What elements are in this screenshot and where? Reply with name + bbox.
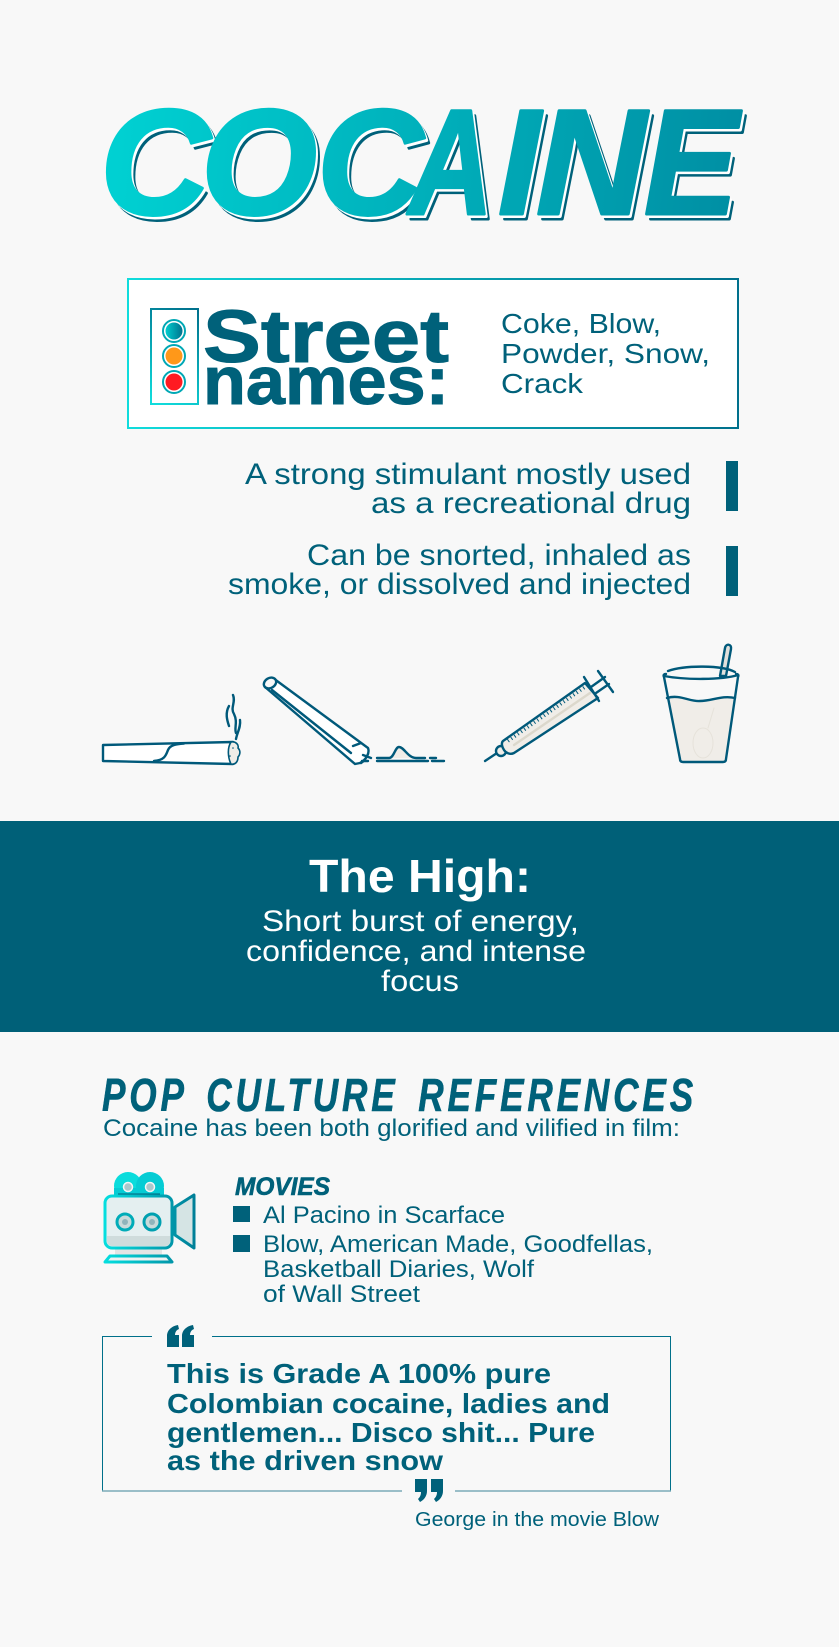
title: E xyxy=(644,78,742,246)
text: high description: confidence, and intense xyxy=(246,935,586,968)
list item: other movies: Basketball Diaries, Wolf xyxy=(263,1256,534,1283)
icon: closing quote mark xyxy=(415,1479,443,1502)
text: street name list: Coke, Blow, xyxy=(501,308,661,339)
text: street name list: Crack xyxy=(501,368,584,399)
text: quote: Colombian cocaine, ladies and xyxy=(167,1388,610,1419)
heading: street names xyxy=(203,295,449,419)
text: stimulant description xyxy=(245,458,691,520)
panel frame xyxy=(128,279,738,428)
title: A xyxy=(410,83,497,251)
text: quote: gentlemen... Disco shit... Pure xyxy=(167,1417,595,1448)
title: I xyxy=(500,80,545,248)
text: high description: Short burst of energy, xyxy=(262,905,579,938)
text: quote attribution: George in the movie Blow xyxy=(415,1509,660,1531)
list item: other movies xyxy=(263,1231,653,1308)
bullet 2 xyxy=(233,1235,250,1252)
icon: joint xyxy=(103,695,240,764)
title: E xyxy=(646,80,744,248)
title: A xyxy=(408,80,495,248)
title: C xyxy=(100,78,213,246)
icon: glass of liquid xyxy=(664,645,738,762)
heading: the high: The High: xyxy=(309,850,531,902)
text: quote: as the driven snow xyxy=(167,1445,443,1476)
text: stimulant description: A strong stimulant mostly used xyxy=(245,458,691,491)
list item: other movies: of Wall Street xyxy=(263,1281,420,1308)
text: methods of use: smoke, or dissolved and injected xyxy=(228,568,691,601)
title: A xyxy=(406,78,493,246)
title: C xyxy=(321,83,430,251)
title: C xyxy=(104,83,217,251)
title: C xyxy=(317,78,426,246)
title: O xyxy=(203,80,319,248)
panel: quote xyxy=(102,1325,671,1531)
icon: traffic light xyxy=(151,309,198,404)
banner background xyxy=(0,821,839,1032)
list item: scarface: Al Pacino in Scarface xyxy=(263,1202,505,1229)
panel: the high xyxy=(0,821,839,1032)
heading: street names: Street xyxy=(203,295,449,378)
title: N xyxy=(536,78,649,246)
icon: opening quote mark xyxy=(167,1325,194,1347)
title: I xyxy=(498,78,543,246)
title: N xyxy=(540,83,653,251)
text: high description xyxy=(246,905,586,998)
text: high description: focus xyxy=(381,965,459,998)
text: quote xyxy=(167,1358,610,1476)
text: methods of use xyxy=(228,539,691,601)
icon: rolled straw and powder xyxy=(262,675,444,764)
icon: syringe xyxy=(485,671,613,761)
title: C xyxy=(102,80,215,248)
accent bar 1 xyxy=(726,461,738,511)
title xyxy=(100,78,746,251)
quote frame xyxy=(102,1336,671,1491)
text: methods of use: Can be snorted, inhaled as xyxy=(307,539,691,572)
title: O xyxy=(201,78,317,246)
text: stimulant description: as a recreational drug xyxy=(371,487,691,520)
heading: street names: names: xyxy=(203,343,449,419)
text: quote: This is Grade A 100% pure xyxy=(167,1358,551,1389)
heading: movies: MOVIES xyxy=(235,1173,330,1201)
title: E xyxy=(648,83,746,251)
panel: street names xyxy=(128,279,738,428)
title: C xyxy=(319,80,428,248)
text: street name list xyxy=(501,308,710,399)
title: O xyxy=(205,83,321,251)
bullet 1 xyxy=(233,1206,250,1222)
title: I xyxy=(502,83,547,251)
title: N xyxy=(538,80,651,248)
panel: movies list xyxy=(233,1173,653,1308)
list item: other movies: Blow, American Made, Goodfellas, xyxy=(263,1231,653,1258)
text: pop culture intro: Cocaine has been both glorified and vilified in film: xyxy=(103,1115,680,1142)
icon: movie camera xyxy=(105,1172,194,1262)
text: street name list: Powder, Snow, xyxy=(501,338,710,369)
accent bar 2 xyxy=(726,546,738,596)
